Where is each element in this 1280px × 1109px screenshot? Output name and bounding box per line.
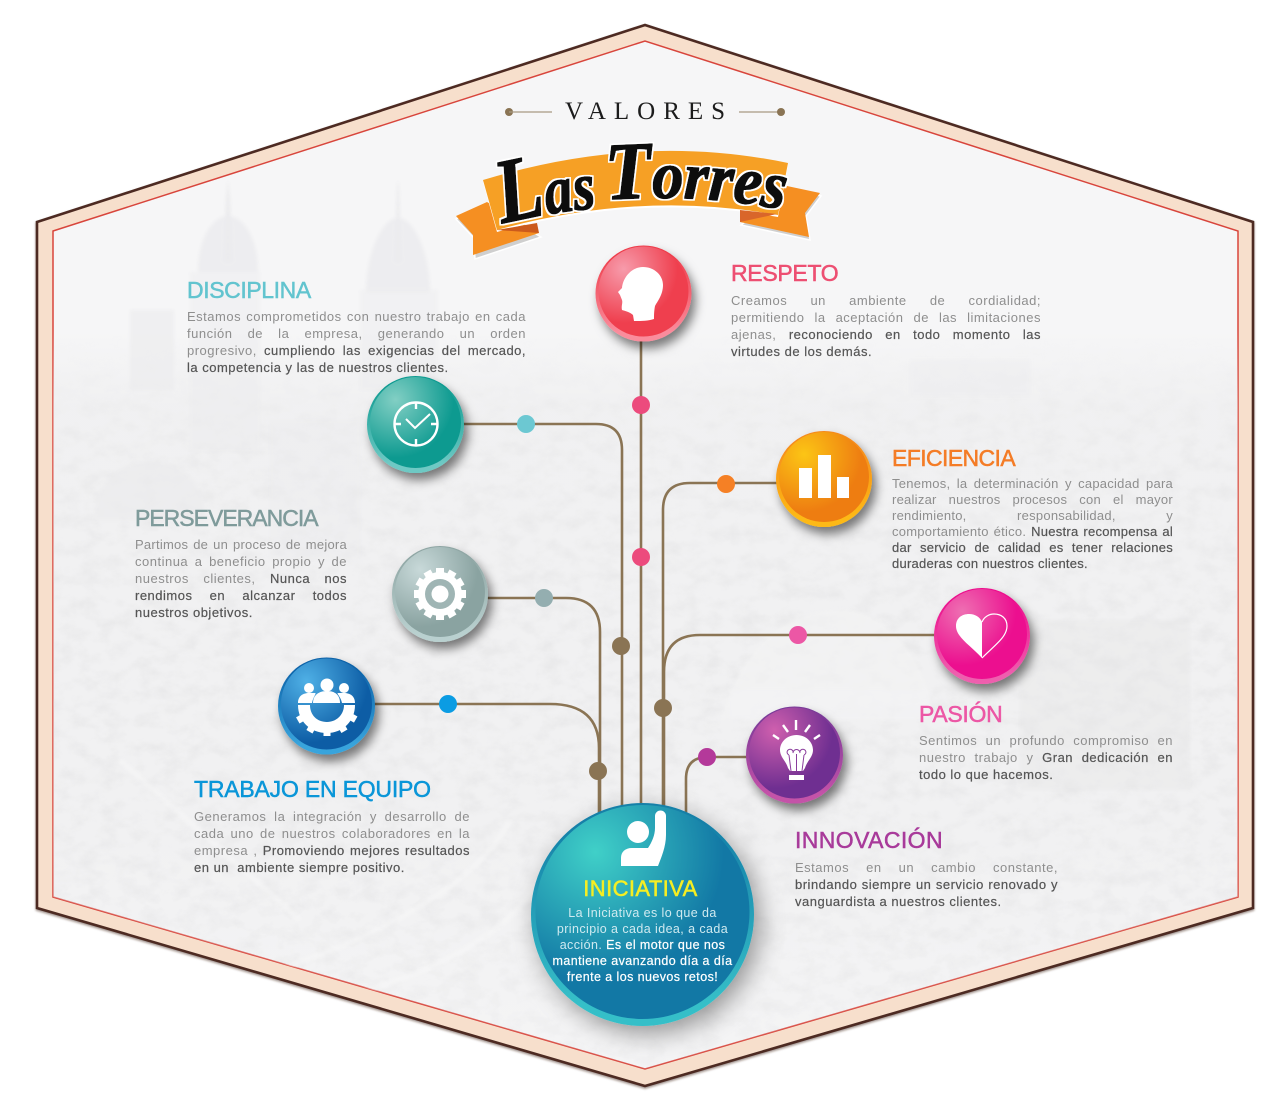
heading: innovacion: INNOVACIÓN [795,827,943,853]
text: disciplina [187,277,526,375]
body: respeto: virtudes de los demás. [731,344,872,359]
body: iniciativa: principio a cada idea, a cada [557,922,728,936]
icon: person raising hand [621,811,666,866]
circle: perseverancia [392,546,488,642]
body: perseverancia: nuestros objetivos. [135,605,253,620]
body: pasion: nuestro trabajo y Gran dedicación en [919,750,1173,765]
ribbon [456,151,821,259]
heading: trabajo en equipo: TRABAJO EN EQUIPO [194,776,431,802]
brand name: Torres [608,142,788,210]
icon: bar chart [799,455,849,498]
circle: eficiencia [776,431,872,527]
circle: pasion [934,588,1030,684]
body: iniciativa [553,906,732,984]
connector lines [372,335,936,820]
body: innovacion: brindando siempre un servicio renovado y [795,877,1058,892]
heading: perseverancia: PERSEVERANCIA [135,505,318,531]
body: disciplina [187,309,526,375]
body: iniciativa: frente a los nuevos retos! [567,970,718,984]
body: eficiencia: dar servicio de calidad es tener relaciones [892,540,1173,555]
body: iniciativa: mantiene avanzando día a día [553,954,732,968]
body: disciplina: Estamos comprometidos con nuestro trabajo en cada [187,309,526,324]
body: eficiencia: Tenemos, la determinación y capacidad para [892,476,1173,491]
body: eficiencia: rendimiento, responsabilidad, y [892,508,1173,523]
body: respeto [731,293,1041,359]
circle: disciplina [367,376,464,473]
text: respeto [731,260,1041,359]
icon: light bulb [773,720,820,780]
body: trabajo en equipo: empresa , Promoviendo mejores resultados [194,843,470,858]
body: eficiencia: comportamiento ético. Nuestra recompensa al [892,524,1173,539]
body: disciplina: progresivo, cumpliendo las exigencias del mercado, [187,343,526,358]
text: iniciativa [553,876,732,984]
body: perseverancia: continua a beneficio propio y de [135,554,347,569]
body: pasion: todo lo que hacemos. [919,767,1053,782]
brand name [496,142,788,226]
body: pasion: Sentimos un profundo compromiso en [919,733,1173,748]
heading: respeto: RESPETO [731,260,838,286]
body: innovacion: Estamos en un cambio constante, [795,860,1058,875]
icon: heart [956,614,1007,658]
heading: pasion: PASIÓN [919,701,1002,727]
body: disciplina: función de la empresa, generando un orden [187,326,526,341]
body: perseverancia: nuestros clientes, Nunca nos [135,571,347,586]
heading: iniciativa: INICIATIVA [583,876,698,901]
body: perseverancia: Partimos de un proceso de mejora [135,537,347,552]
circle: respeto [596,246,692,342]
body: perseverancia [135,537,347,620]
heading: disciplina: DISCIPLINA [187,277,311,303]
circle: trabajo en equipo [278,658,375,754]
icon: clock [394,402,438,446]
body: trabajo en equipo: Generamos la integración y desarrollo de [194,809,470,824]
body: innovacion: vanguardista a nuestros clientes. [795,894,1002,909]
body: trabajo en equipo: cada uno de nuestros colaboradores en la [194,826,470,841]
icon: gear [414,568,466,620]
orange ribbon with brand name [455,142,822,260]
text: eficiencia [892,445,1173,571]
circle: innovacion [746,706,843,804]
circle: iniciativa [531,803,754,1026]
text: trabajo en equipo [194,776,470,875]
body: eficiencia [892,476,1173,571]
body: trabajo en equipo [194,809,470,875]
text: perseverancia [135,505,347,620]
connector dots [439,396,807,780]
body: eficiencia: realizar nuestros procesos con el mayor [892,492,1173,507]
body: perseverancia: rendimos en alcanzar todos [135,588,347,603]
body: eficiencia: duraderas con nuestros clientes. [892,556,1088,571]
text: pasion [919,701,1173,782]
heading: eficiencia: EFICIENCIA [892,445,1015,471]
icon: team gear [296,678,357,736]
body: respeto: permitiendo la aceptación de las limitaciones [731,310,1041,325]
body: disciplina: la competencia y las de nuestros clientes. [187,360,449,375]
title: valores with ornament lines: VALORES [565,98,733,125]
text: innovacion [795,827,1058,909]
brand name: Las [496,156,595,226]
body: trabajo en equipo: en un ambiente siempre positivo. [194,860,405,875]
body: pasion [919,733,1173,782]
body: respeto: Creamos un ambiente de cordialidad; [731,293,1041,308]
body: innovacion [795,860,1058,909]
body: iniciativa: La Iniciativa es lo que da [568,906,717,920]
icon: head profile [618,267,663,321]
body: respeto: ajenas, reconociendo en todo momento las [731,327,1041,342]
body: iniciativa: acción. Es el motor que nos [560,938,725,952]
